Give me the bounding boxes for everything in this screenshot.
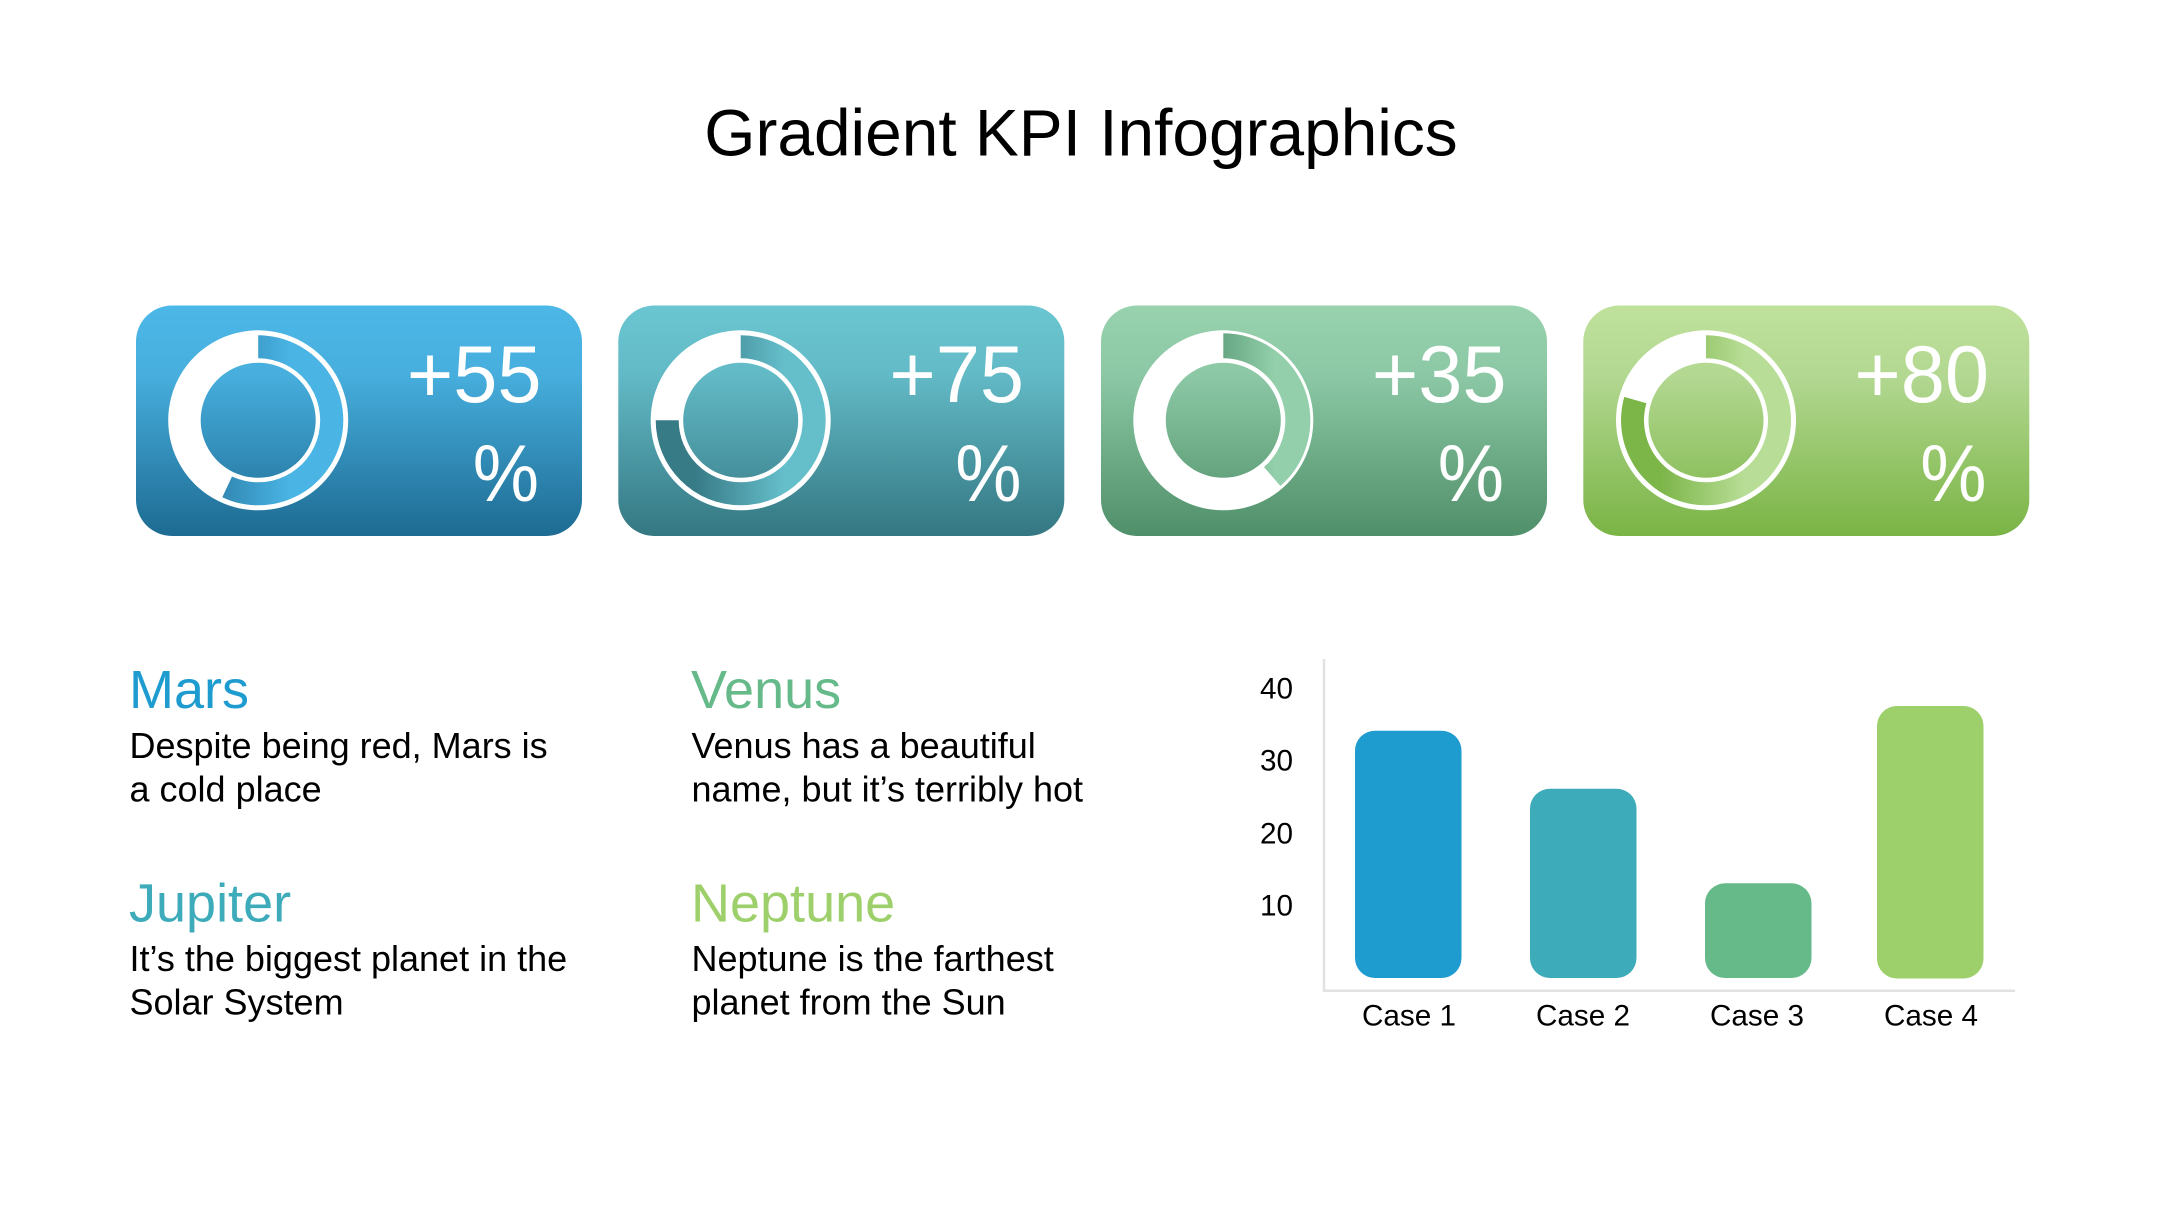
y axis labels: 30	[1260, 745, 1293, 778]
value: +80	[1854, 328, 1989, 419]
value: +55	[407, 328, 542, 419]
donut chart	[1133, 330, 1313, 510]
panel: KPI card +75%	[618, 306, 1064, 536]
bar: Case 1	[1355, 731, 1462, 978]
x axis labels: Case 3	[1710, 1000, 1804, 1032]
x axis labels: Case 1	[1362, 1000, 1456, 1032]
description: Mars: a cold place	[130, 768, 322, 810]
panel: KPI card +55%	[136, 306, 582, 536]
text block: Jupiter	[129, 874, 567, 1022]
description: Jupiter: Solar System	[130, 982, 344, 1022]
value: +35	[1372, 328, 1506, 419]
description: Mars: Despite being red, Mars is	[130, 725, 548, 766]
x axis labels	[1362, 1000, 1978, 1032]
y axis labels	[1260, 672, 1293, 923]
description: Venus: Venus has a beautiful	[692, 725, 1036, 766]
heading: Venus: Venus	[691, 660, 841, 720]
description: Jupiter: It’s the biggest planet in the	[130, 938, 567, 979]
y axis labels: 10	[1260, 890, 1293, 923]
percent sign: %	[1438, 429, 1504, 519]
description: Venus: name, but it’s terribly hot	[692, 768, 1083, 810]
percent sign: %	[955, 429, 1022, 519]
heading: Neptune: Neptune	[691, 874, 895, 934]
bar: Case 3	[1705, 883, 1812, 978]
panel: KPI card +35%	[1101, 306, 1547, 536]
donut chart	[651, 330, 831, 510]
percent sign: %	[473, 429, 539, 519]
percent sign: %	[1920, 429, 1986, 519]
x axis labels: Case 2	[1536, 1000, 1630, 1032]
x axis labels: Case 4	[1884, 1000, 1978, 1032]
value: +75	[889, 328, 1024, 419]
text block: Venus	[691, 660, 1083, 810]
card background	[1583, 306, 2029, 536]
bar chart	[1260, 659, 2015, 1032]
description: Neptune: planet from the Sun	[692, 982, 1006, 1022]
y axis labels: 20	[1260, 817, 1293, 850]
bar: Case 4	[1877, 706, 1984, 978]
panel: KPI card +80%	[1583, 306, 2029, 536]
donut chart	[1616, 330, 1796, 510]
donut chart	[168, 330, 348, 510]
card background	[618, 306, 1064, 536]
bar: Case 2	[1530, 789, 1636, 978]
heading: Mars: Mars	[129, 660, 249, 720]
card background	[136, 306, 582, 536]
heading: Jupiter: Jupiter	[129, 874, 291, 934]
title: Gradient KPI Infographics	[704, 96, 1458, 170]
text block: Mars	[129, 660, 548, 810]
description: Neptune: Neptune is the farthest	[692, 938, 1054, 979]
card background	[1101, 306, 1547, 536]
text block: Neptune	[691, 874, 1054, 1022]
y axis labels: 40	[1260, 672, 1293, 705]
